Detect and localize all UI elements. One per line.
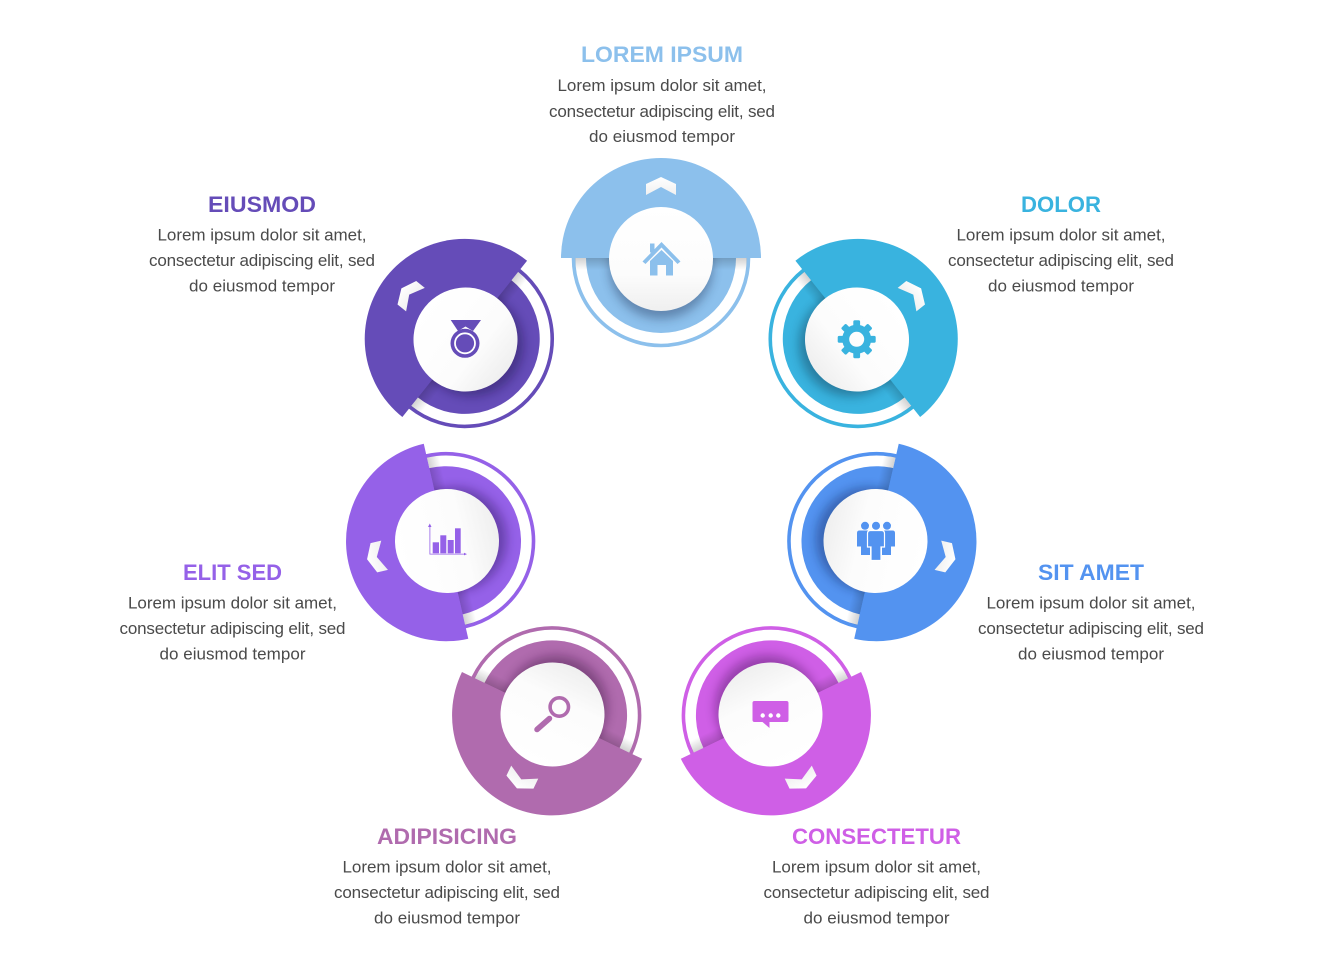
outer ring xyxy=(574,170,748,346)
chevron arrow xyxy=(785,766,820,795)
description: do eiusmod tempor xyxy=(1018,644,1164,664)
chevron arrow xyxy=(392,277,425,311)
chevron arrow xyxy=(646,177,676,195)
white circle xyxy=(813,479,938,603)
chevron arrow xyxy=(898,277,930,311)
text: consectetur xyxy=(764,824,990,928)
heading: LOREM IPSUM xyxy=(581,42,743,67)
description: Lorem ipsum dolor sit amet, xyxy=(128,594,337,612)
outer ring xyxy=(341,436,551,646)
half-circle sector xyxy=(795,198,998,417)
half-circle sector xyxy=(854,444,996,661)
chevron arrow xyxy=(364,541,388,574)
description: consectetur adipiscing elit, sed xyxy=(549,102,775,121)
half-circle sector xyxy=(561,158,761,258)
outer ring xyxy=(654,599,888,832)
text: dolor xyxy=(948,192,1174,296)
text: sit amet xyxy=(978,560,1204,664)
description xyxy=(334,858,560,928)
inner disk xyxy=(787,451,966,631)
text: elit sed xyxy=(120,560,346,664)
heading: ADIPISICING xyxy=(377,824,517,849)
description xyxy=(120,594,346,664)
panel: consectetur dial xyxy=(680,626,871,816)
description: consectetur adipiscing elit, sed xyxy=(149,251,375,270)
white circle xyxy=(392,266,539,413)
description: consectetur adipiscing elit, sed xyxy=(764,883,990,902)
description xyxy=(549,76,775,146)
panel: elit sed dial xyxy=(346,444,536,642)
description: consectetur adipiscing elit, sed xyxy=(334,883,560,902)
half-circle sector xyxy=(324,198,527,417)
heading: ELIT SED xyxy=(183,560,282,585)
outer ring xyxy=(435,599,669,832)
description: consectetur adipiscing elit, sed xyxy=(948,251,1174,270)
text: eiusmod xyxy=(149,192,375,296)
panel: sit amet dial xyxy=(787,444,976,642)
inner disk xyxy=(586,183,736,333)
heading: EIUSMOD xyxy=(208,192,316,217)
icon: chat bubble xyxy=(752,701,788,728)
description xyxy=(978,594,1204,664)
description xyxy=(764,858,990,928)
panel: dolor dial xyxy=(768,238,958,428)
description: Lorem ipsum dolor sit amet, xyxy=(986,594,1196,612)
icon: gear xyxy=(838,320,876,358)
white circle xyxy=(385,479,509,603)
heading: DOLOR xyxy=(1021,192,1101,217)
inner disk xyxy=(356,451,536,631)
half-circle sector xyxy=(419,672,642,849)
outer ring xyxy=(735,216,981,462)
description: Lorem ipsum dolor sit amet, xyxy=(342,858,552,876)
inner disk xyxy=(359,233,570,444)
chevron arrow xyxy=(503,766,538,795)
inner disk xyxy=(452,615,652,816)
description: do eiusmod tempor xyxy=(988,276,1134,296)
description: consectetur adipiscing elit, sed xyxy=(978,619,1204,638)
chevron arrow xyxy=(935,541,959,574)
panel: eiusmod dial xyxy=(364,238,554,428)
icon: people xyxy=(857,521,895,560)
inner disk xyxy=(671,615,871,816)
text: adipisicing xyxy=(334,824,560,928)
white circle xyxy=(701,645,840,784)
panel: lorem ipsum dial xyxy=(561,158,761,346)
white circle xyxy=(609,207,713,311)
half-circle sector xyxy=(326,444,468,661)
inner disk xyxy=(752,233,963,444)
icon: medal xyxy=(450,320,481,358)
description: do eiusmod tempor xyxy=(189,276,335,296)
outer ring xyxy=(342,216,588,462)
icon: bar chart xyxy=(428,524,467,555)
description: Lorem ipsum dolor sit amet, xyxy=(956,226,1166,244)
heading: SIT AMET xyxy=(1038,560,1144,585)
white circle xyxy=(483,645,622,784)
description: do eiusmod tempor xyxy=(374,908,520,928)
text: lorem ipsum xyxy=(549,42,775,146)
description xyxy=(948,226,1174,296)
description: do eiusmod tempor xyxy=(160,644,306,664)
description: do eiusmod tempor xyxy=(804,908,950,928)
description: consectetur adipiscing elit, sed xyxy=(120,619,346,638)
outer ring xyxy=(772,436,981,646)
description: Lorem ipsum dolor sit amet, xyxy=(558,76,766,95)
white circle xyxy=(784,266,930,413)
description xyxy=(149,226,375,296)
icon: house xyxy=(642,242,680,276)
description: Lorem ipsum dolor sit amet, xyxy=(772,858,981,876)
half-circle sector xyxy=(681,672,904,849)
panel: adipisicing dial xyxy=(452,626,642,816)
description: Lorem ipsum dolor sit amet, xyxy=(158,226,366,244)
description: do eiusmod tempor xyxy=(589,127,735,146)
icon: magnifier xyxy=(537,698,568,730)
heading: CONSECTETUR xyxy=(792,824,961,849)
